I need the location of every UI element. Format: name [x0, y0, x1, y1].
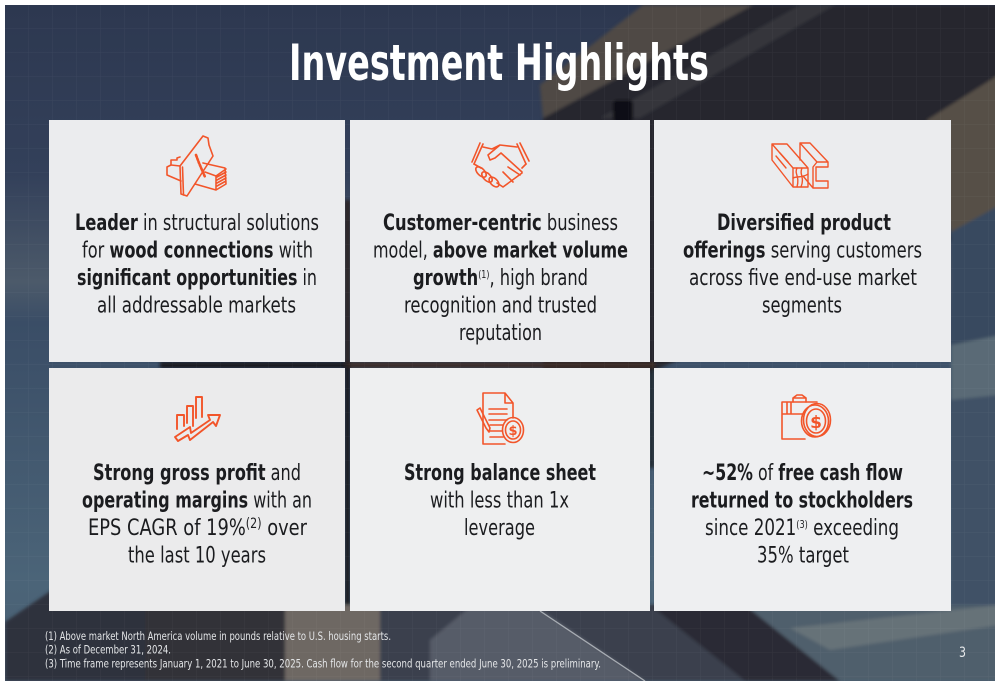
text: gross profit [82, 460, 312, 568]
icon: wood connector [167, 136, 226, 196]
text: gross profit: over [262, 515, 308, 541]
icon: wallet with coin [782, 395, 830, 439]
panel: margins background [49, 368, 345, 611]
panel: balance sheet background [350, 368, 650, 611]
text: diversified products: across five end-use market [689, 265, 917, 291]
text: customer-centric: reputation [459, 320, 542, 346]
text: diversified products: offerings serving customers [683, 238, 922, 264]
text: diversified products: segments [762, 292, 842, 318]
icon: balance sheet document [477, 393, 524, 444]
icon: balance sheet document: $ [508, 424, 518, 439]
text: gross profit: (2) [246, 516, 262, 532]
text: balance sheet: with less than 1x [430, 488, 569, 514]
text: customer-centric: recognition and trusted [404, 292, 597, 318]
panel: structural solutions background [49, 120, 345, 362]
text: customer-centric: growth [413, 265, 478, 291]
title: Investment Highlights [289, 34, 709, 92]
text: diversified products: Diversified product [717, 210, 891, 236]
footnotes: (2) As of December 31, 2024. [45, 642, 171, 656]
text: customer-centric: (1) [478, 268, 489, 281]
panel: customer-centric background [350, 120, 650, 362]
text: balance sheet [404, 460, 596, 541]
text: gross profit: Strong gross profit and [93, 460, 301, 486]
text: gross profit: EPS CAGR of 19% [88, 515, 287, 541]
text: leader: Leader in structural solutions [75, 210, 319, 236]
text: leader: for wood connections with [82, 238, 313, 264]
text: customer-centric [373, 210, 628, 346]
panels [49, 120, 951, 611]
panel: free cash flow background [654, 368, 951, 611]
text: customer-centric: Customer-centric business [383, 210, 618, 236]
text: customer-centric: , high brand [489, 265, 588, 291]
footnotes: (3) Time frame represents January 1, 2021 to June 30, 2025. Cash flow for the second quarter ended June 30, 2025 is preliminary. [45, 656, 601, 670]
text: free cash flow: (3) [796, 518, 808, 531]
text: free cash flow [691, 460, 913, 568]
text: gross profit: operating margins with an [82, 488, 312, 514]
text: balance sheet: Strong balance sheet [404, 460, 596, 486]
text: diversified products [683, 210, 922, 318]
text: leader: significant opportunities in [77, 265, 317, 291]
icon: lumber and steel beams [772, 143, 828, 188]
text: free cash flow: exceeding [808, 515, 899, 541]
panel: product offerings background [654, 120, 951, 362]
icon: handshake [472, 143, 529, 189]
text: balance sheet: leverage [464, 515, 535, 541]
text: free cash flow: ~52% of free cash flow [702, 460, 903, 486]
icon: growth chart [175, 397, 220, 441]
icon: wallet with coin: $ [810, 413, 822, 433]
footnotes: (1) Above market North America volume in pounds relative to U.S. housing starts. [45, 629, 391, 643]
text: leader [75, 210, 319, 318]
footnotes [45, 629, 601, 670]
text: free cash flow: since 2021 [705, 515, 828, 541]
text: free cash flow: 35% target [757, 542, 849, 568]
text: leader: all addressable markets [97, 292, 296, 318]
text: gross profit: the last 10 years [128, 542, 266, 568]
page number: 3 [959, 645, 966, 661]
text: customer-centric: model, above market volume [373, 238, 628, 264]
text: free cash flow: returned to stockholders [691, 488, 913, 514]
